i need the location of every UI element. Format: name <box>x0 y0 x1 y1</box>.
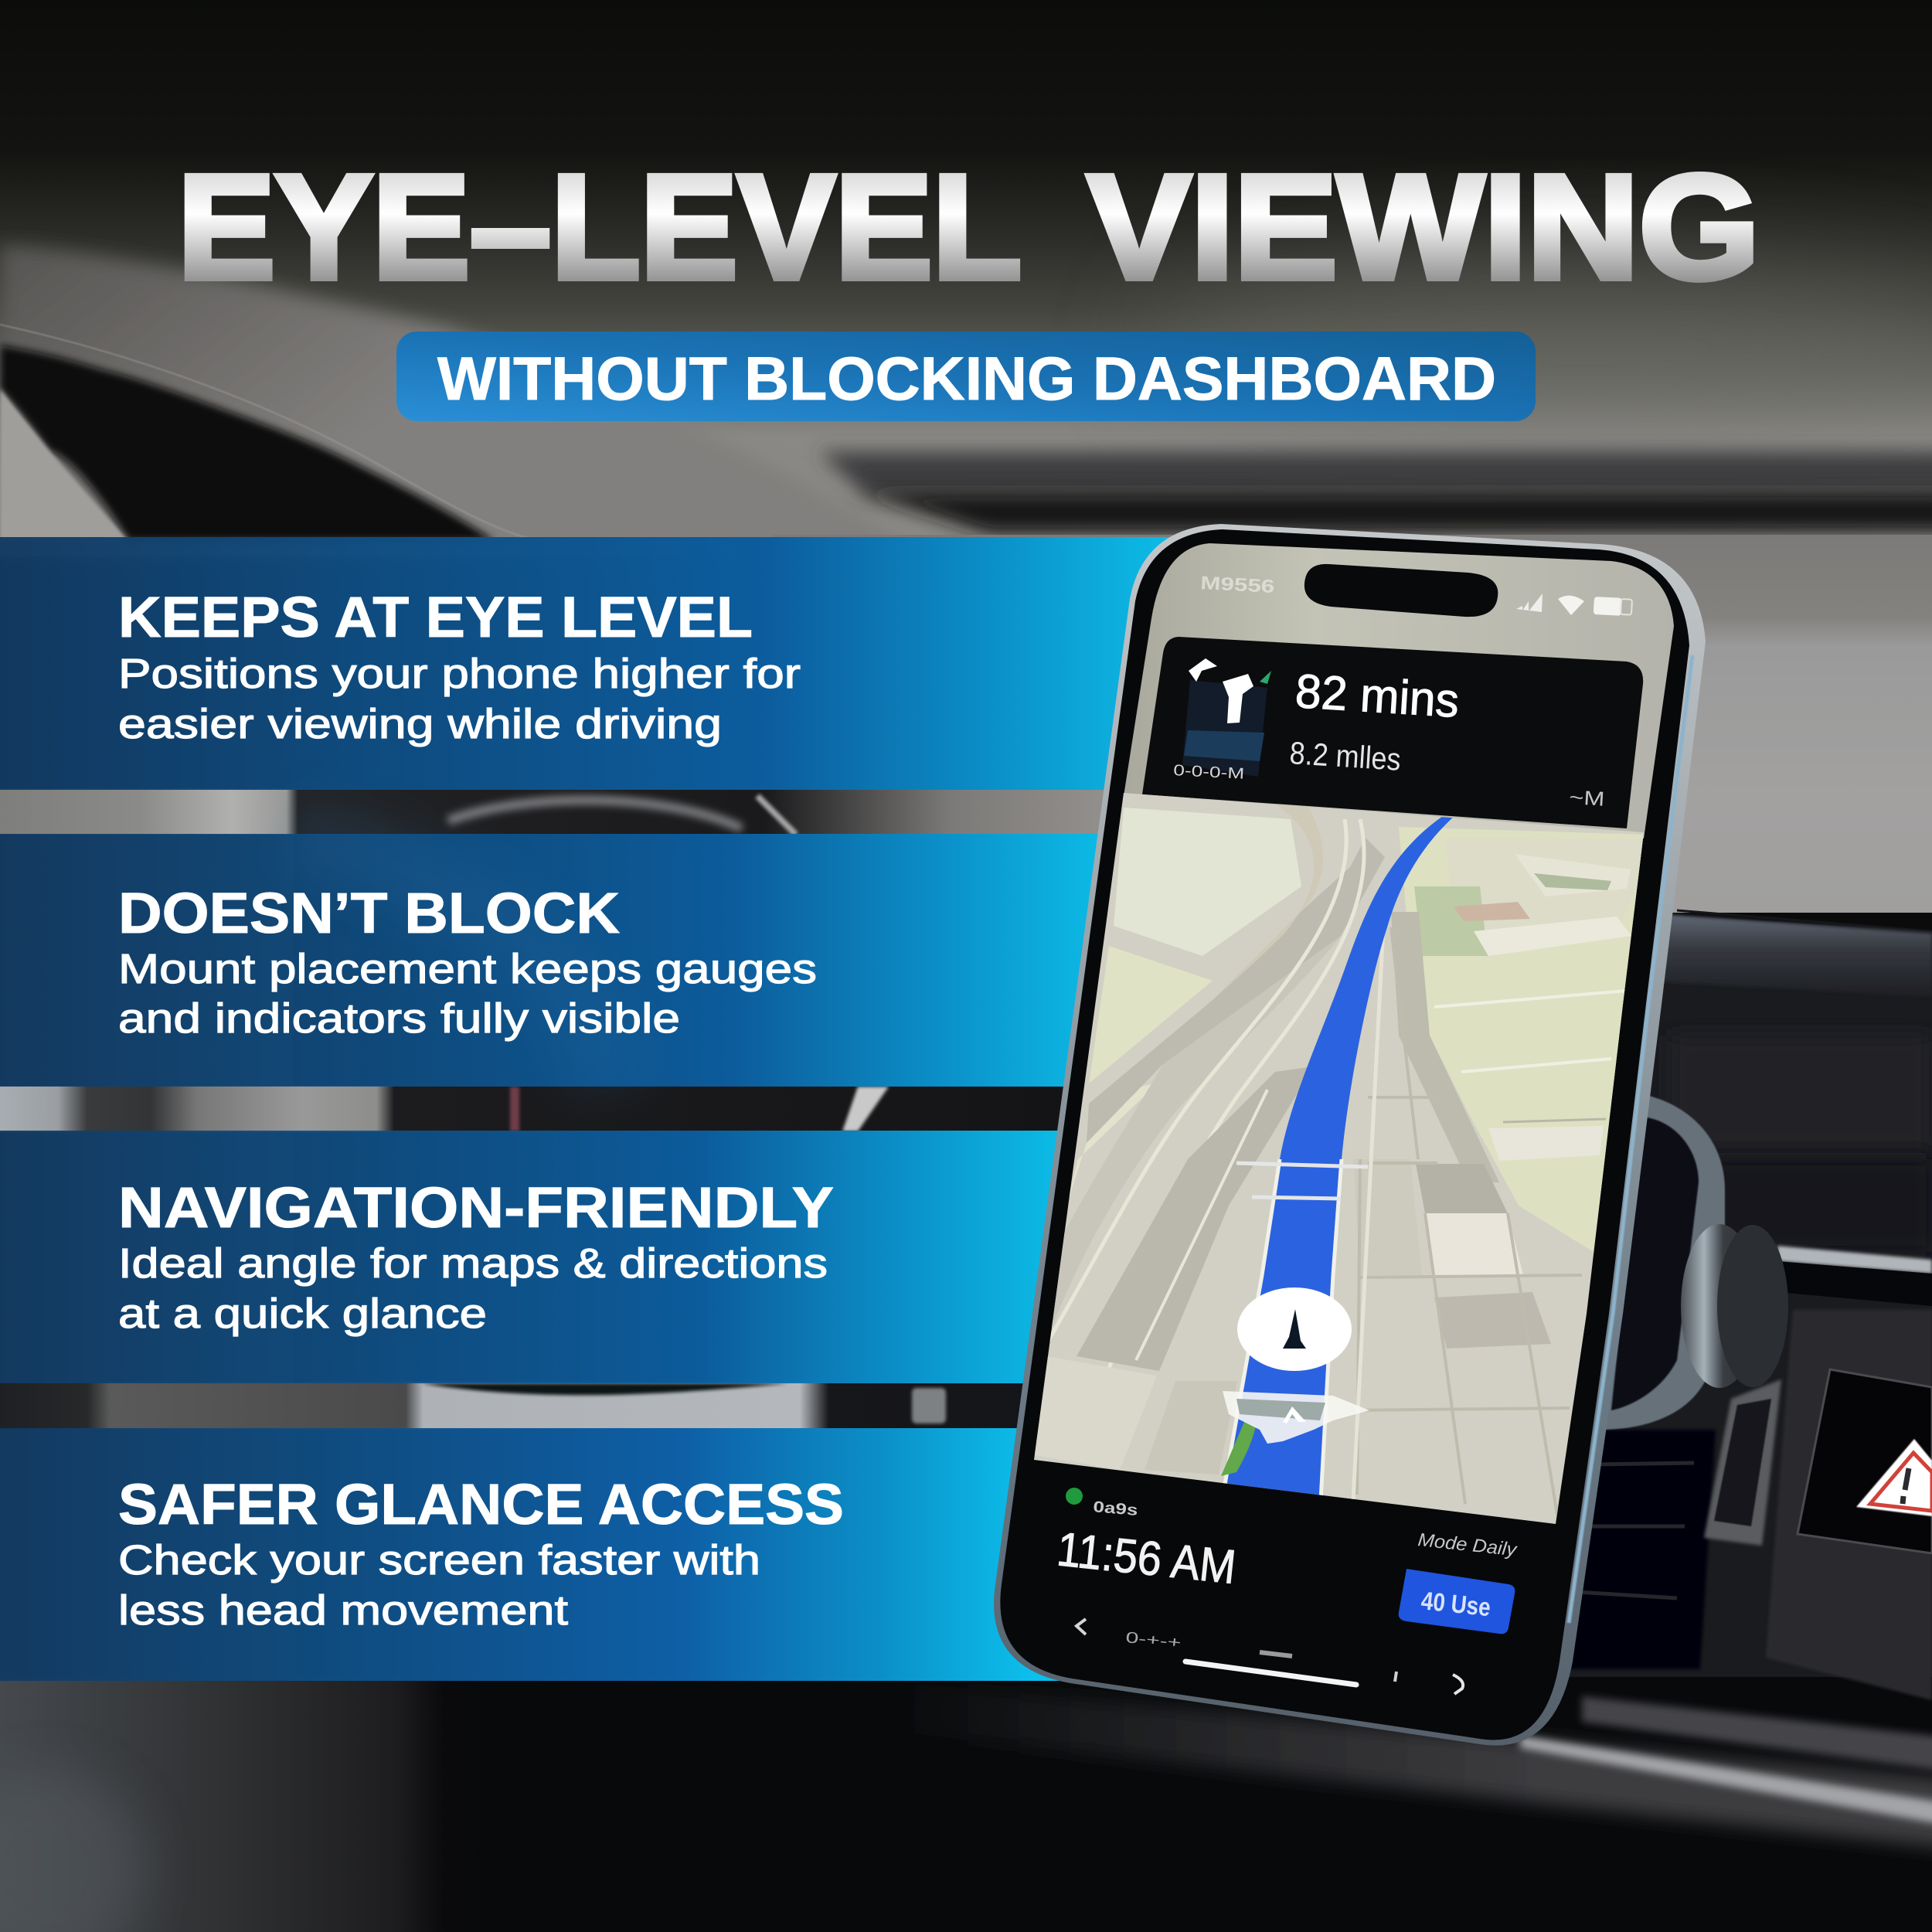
city blocks <box>1034 1357 1111 1456</box>
turn icon: 0-0-0-M <box>1173 762 1245 783</box>
chrome trim lines <box>889 1681 1932 1855</box>
panel: navigation-friendly: at a quick glance <box>118 1291 487 1337</box>
navigation card: ~M <box>1569 785 1605 811</box>
vent top chrome <box>1777 1246 1932 1274</box>
centre panel <box>1766 1310 1932 1700</box>
subtitle pill: WITHOUT BLOCKING DASHBOARD <box>437 344 1496 413</box>
screen upper glass <box>1124 543 1674 838</box>
nav icons <box>1077 1619 1086 1634</box>
action button <box>1399 1569 1515 1634</box>
title: VIEWING <box>1087 144 1760 310</box>
vent slats <box>1553 1430 1716 1669</box>
bottom panel <box>1055 1488 1519 1694</box>
action button: 40 Use <box>1420 1586 1492 1621</box>
panel: doesn't block: Mount placement keeps gauges <box>118 946 817 992</box>
lower left wheel spoke and bottom console <box>0 1677 1932 1932</box>
dark instrument cluster area <box>294 834 1159 1684</box>
panel: keeps at eye level: easier viewing while driving <box>118 701 722 747</box>
panel: doesn't block <box>0 834 1144 1087</box>
right console <box>1515 913 1932 1777</box>
status bar: M9556 <box>1200 573 1275 597</box>
wide road bundle <box>1087 838 1385 1143</box>
bottom panel: Mode Daily <box>1417 1529 1519 1561</box>
title <box>178 144 1760 310</box>
bottom panel: 0-+-+ <box>1124 1629 1182 1651</box>
panel: navigation-friendly: NAVIGATION-FRIENDLY <box>118 1175 834 1240</box>
navigation card <box>1142 637 1643 828</box>
panel: safer glance access: less head movement <box>118 1587 568 1634</box>
dashboard seam <box>1677 910 1932 931</box>
upper dashboard dark strip <box>819 452 1932 495</box>
icon: magnetic vent mount <box>1600 1094 1788 1430</box>
panel: navigation-friendly: Ideal angle for maps & directions <box>118 1240 828 1287</box>
dashboard light top right <box>773 535 1932 913</box>
panel: doesn't block: and indicators fully visible <box>118 995 680 1042</box>
panel: doesn't block: DOESN’T BLOCK <box>118 881 620 945</box>
gaps between bands <box>0 788 1159 835</box>
arrival time: 11:56 AM <box>1055 1522 1238 1594</box>
dynamic island <box>1304 564 1498 617</box>
distance: 8.2 mlles <box>1288 735 1402 777</box>
steering wheel dark band <box>0 345 495 541</box>
steering wheel rim <box>0 245 927 556</box>
phone body <box>994 524 1706 1746</box>
icon: hazard button <box>1798 1369 1932 1553</box>
car marker <box>1223 1391 1369 1444</box>
panel: keeps at eye level <box>0 537 1206 790</box>
panel: safer glance access: Check your screen faster with <box>118 1537 760 1583</box>
panel: safer glance access <box>0 1428 1082 1681</box>
status bar <box>1200 564 1632 617</box>
eta: 82 mins <box>1294 665 1461 728</box>
phone <box>994 524 1706 1746</box>
bottom panel: 0a9s <box>1093 1498 1138 1519</box>
panel: keeps at eye level: Positions your phone higher for <box>118 651 801 697</box>
panel: keeps at eye level: KEEPS AT EYE LEVEL <box>118 585 753 649</box>
vent wheel <box>1704 1379 1781 1546</box>
location bubble <box>1237 1287 1352 1371</box>
map <box>1034 793 1644 1524</box>
title: EYE–LEVEL <box>178 144 1022 310</box>
left wheel wedge <box>0 389 128 541</box>
turn icon <box>1173 658 1271 783</box>
panel: safer glance access: SAFER GLANCE ACCESS <box>118 1472 844 1536</box>
signal wifi battery <box>1516 594 1543 612</box>
left fields <box>1114 808 1301 956</box>
status dot <box>1066 1488 1083 1505</box>
right edge highlight <box>1569 655 1692 1623</box>
stitching line <box>0 325 541 541</box>
panel: navigation-friendly <box>0 1131 1097 1383</box>
route <box>1222 813 1454 1515</box>
right fields <box>1399 827 1646 1252</box>
